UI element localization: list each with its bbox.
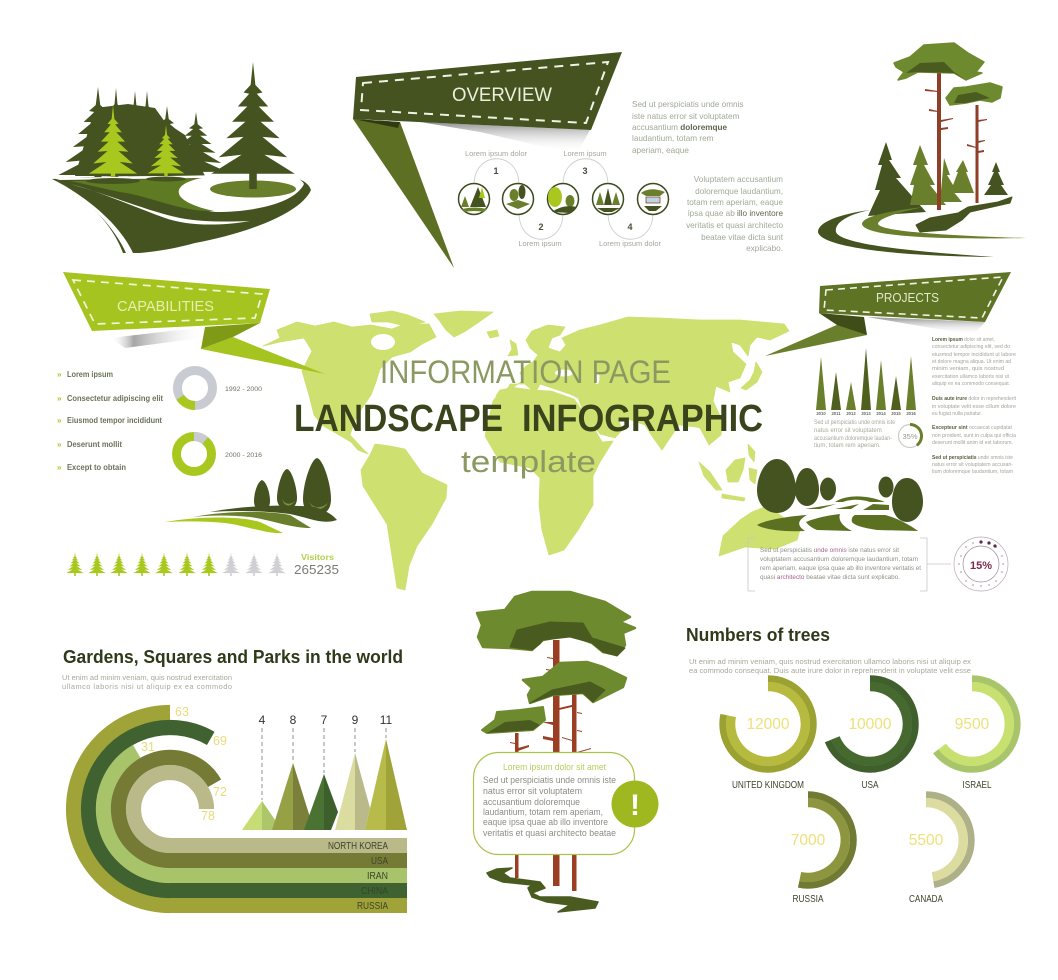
icon: step 2 grove bbox=[502, 184, 534, 214]
info box text: veritatis et quasi architecto beatae bbox=[483, 828, 616, 838]
spike chart years: 2014 bbox=[876, 411, 886, 416]
capabilities list: Deserunt mollit bbox=[67, 440, 122, 449]
pine crown large bbox=[894, 43, 984, 80]
list bullets: » bbox=[57, 394, 62, 403]
visitors counter bbox=[294, 552, 339, 577]
text: overview right paragraph bbox=[686, 175, 784, 253]
band end values: 78 bbox=[201, 809, 215, 823]
ring: russia: RUSSIA bbox=[792, 894, 824, 905]
ring: usa bbox=[828, 679, 915, 791]
map: Sumatra bbox=[699, 462, 722, 490]
text: gardens subtitle bbox=[62, 673, 232, 691]
list bullets: » bbox=[57, 440, 62, 449]
donut: 35%: 35% bbox=[902, 432, 918, 441]
triangle 4 bbox=[335, 753, 355, 830]
map: Hudson Bay bbox=[371, 334, 395, 350]
banner fold bbox=[201, 323, 260, 349]
text: projects column: consectetur adipiscing elit, sed do bbox=[932, 344, 1010, 350]
step numbers: 2 bbox=[538, 222, 544, 232]
capabilities list: Consectetur adipiscing elit bbox=[67, 394, 163, 403]
capabilities list bbox=[57, 370, 163, 472]
map: Borneo bbox=[726, 458, 745, 482]
ring: united kingdom bbox=[723, 679, 813, 791]
spruce trees bbox=[868, 142, 1008, 216]
triangle values: 8 bbox=[290, 713, 297, 727]
donut: 35% bbox=[898, 424, 922, 448]
band labels: NORTH KOREA bbox=[328, 841, 388, 852]
text: overview right paragraph: totam rem aperiam, eaque bbox=[687, 198, 783, 207]
icon: step 5 pavilion bbox=[638, 184, 668, 214]
icon: exclamation badge bbox=[612, 780, 658, 828]
text: overview right paragraph: explicabo. bbox=[746, 244, 783, 253]
band end values: 72 bbox=[213, 785, 227, 799]
dashed leaders bbox=[262, 728, 386, 800]
step labels: Lorem ipsum dolor bbox=[599, 239, 662, 248]
ring: israel: 9500 bbox=[955, 716, 990, 733]
banner fold bbox=[353, 119, 400, 128]
ring: united kingdom: 12000 bbox=[746, 716, 790, 733]
text: projects column: exercitation ullamco laboris nisi ut bbox=[932, 374, 1009, 380]
band labels: CHINA bbox=[361, 886, 388, 897]
map: Java bbox=[722, 494, 745, 501]
banner title: PROJECTS bbox=[876, 291, 939, 305]
road edge bbox=[60, 183, 133, 253]
map: South America bbox=[361, 444, 447, 590]
text: projects column: in voluptate velit esse cillum dolore bbox=[932, 404, 1016, 410]
capabilities list: Lorem ipsum bbox=[67, 370, 113, 379]
text: overview left paragraph: Sed ut perspiciatis unde omnis bbox=[632, 100, 744, 109]
scene: three trees on hills bbox=[165, 458, 337, 533]
map: Eurasia bbox=[496, 317, 789, 450]
icon: step 1 spruce bbox=[458, 184, 490, 214]
hill dark bbox=[210, 506, 337, 522]
banner ribbon bbox=[353, 52, 622, 130]
illustration: pine trees with info box bbox=[474, 592, 658, 912]
band end values bbox=[141, 705, 227, 823]
ring: usa: USA bbox=[862, 780, 879, 791]
info box text bbox=[483, 775, 616, 838]
icon: step 4 park bbox=[592, 184, 624, 214]
arcs bbox=[74, 712, 215, 906]
map: Australia bbox=[719, 506, 800, 556]
tree shadows bbox=[86, 178, 140, 184]
map: arctic islands bbox=[370, 311, 425, 326]
rounded trees bbox=[757, 459, 923, 522]
crown small bbox=[482, 707, 545, 733]
gauge dots bbox=[958, 540, 1004, 587]
banner ribbon bbox=[819, 272, 1011, 322]
ring: canada: 5500 bbox=[909, 832, 944, 849]
text: numbers subtitle bbox=[689, 657, 971, 675]
text: projects column bbox=[932, 337, 1017, 475]
ring: israel: ISRAEL bbox=[962, 780, 992, 791]
donut: 2000-2016 bbox=[176, 436, 262, 472]
stitches bbox=[824, 277, 1003, 318]
text: projects column: non proident, sunt in culpa qui officia bbox=[932, 433, 1017, 439]
text: overview right paragraph: beatae vitae dicta sunt bbox=[701, 233, 784, 242]
title line 2: LANDSCAPE bbox=[294, 398, 503, 440]
horizontal bands bbox=[170, 838, 407, 853]
hill light bbox=[165, 518, 283, 533]
step numbers: 1 bbox=[493, 166, 499, 176]
triangle values: 7 bbox=[321, 713, 328, 727]
map: Japan bbox=[741, 362, 762, 390]
banner tail bbox=[201, 337, 325, 374]
info box text: natus error sit voluptatem bbox=[483, 786, 582, 796]
crown top bbox=[477, 592, 635, 655]
info box text: eaque ipsa quae ab illo inventore bbox=[483, 817, 608, 827]
map: Caspian Sea bbox=[594, 372, 600, 384]
lawn circle bbox=[210, 180, 296, 198]
icon: exclamation badge: ! bbox=[630, 789, 640, 822]
stitches bbox=[361, 62, 608, 123]
text: overview left paragraph: iste natus error sit voluptatem bbox=[632, 112, 740, 121]
triangle values bbox=[259, 713, 393, 727]
crown middle bbox=[523, 662, 626, 703]
banner fold bbox=[819, 313, 867, 335]
step labels: Lorem ipsum bbox=[563, 149, 607, 158]
callout text: quasi architecto beatae vitae dicta sunt explicabo. bbox=[760, 574, 900, 581]
info box text: accusantium doloremque bbox=[483, 797, 580, 807]
spike chart years: 2016 bbox=[906, 411, 916, 416]
donut: 1992-2000: 1992 - 2000 bbox=[225, 386, 262, 393]
triangle 2 bbox=[272, 763, 293, 830]
step labels: Lorem ipsum dolor bbox=[465, 149, 528, 158]
stitches bbox=[73, 280, 262, 324]
scene: pines and winding road bbox=[818, 43, 1026, 257]
title block bbox=[294, 354, 763, 479]
winding river bbox=[916, 197, 1012, 232]
trees bbox=[254, 480, 270, 511]
capabilities list: Eiusmod tempor incididunt bbox=[67, 416, 162, 425]
donut: 2000-2016: 2000 - 2016 bbox=[225, 452, 262, 459]
title line 3: template bbox=[461, 444, 596, 479]
tree highlights bbox=[282, 498, 328, 509]
ring: russia: 7000 bbox=[791, 832, 826, 849]
callout bracket bbox=[748, 538, 951, 591]
banner title: OVERVIEW bbox=[452, 85, 552, 106]
forest backdrop bbox=[58, 87, 227, 187]
text: projects column: minim veniam, quis nostrud bbox=[932, 366, 1004, 372]
pine crown small bbox=[946, 83, 1002, 105]
banner ribbon bbox=[63, 272, 270, 331]
big spruce bbox=[211, 62, 295, 189]
capabilities list: Except to obtain bbox=[67, 463, 126, 472]
text: projects column: eu fugiat nulla pariatur. bbox=[932, 411, 982, 417]
map: United Kingdom bbox=[508, 340, 518, 356]
chart: triangles bbox=[242, 713, 407, 830]
band end values: 63 bbox=[175, 705, 189, 719]
heading: gardens: Gardens, Squares and Parks in the world bbox=[63, 647, 403, 667]
chart: curved bands bbox=[74, 705, 407, 913]
band labels: USA bbox=[371, 856, 388, 867]
list bullets: » bbox=[57, 463, 62, 472]
banner shadow bbox=[420, 122, 590, 152]
text: overview right paragraph: ipsa quae ab illo inventore bbox=[688, 209, 783, 218]
text: chart caption: tium, totam rem aperiam. bbox=[814, 443, 881, 449]
trunks bbox=[510, 640, 591, 891]
spike chart years bbox=[816, 411, 916, 416]
info box title: Lorem ipsum dolor sit amet bbox=[503, 762, 606, 772]
connecting arcs bbox=[474, 159, 653, 239]
world map bbox=[263, 311, 800, 590]
map: Africa bbox=[485, 387, 613, 555]
map: Greenland bbox=[434, 311, 493, 337]
visitors tree row bbox=[66, 552, 286, 576]
text: chart caption: Sed ut perspiciatis unde omnis iste bbox=[814, 420, 896, 426]
text: projects column: Lorem ipsum dolor sit amet, bbox=[932, 337, 995, 343]
text: overview left paragraph: aperiam, eaque bbox=[632, 146, 689, 155]
crown middle shade bbox=[530, 682, 605, 703]
visitors counter: 265235 bbox=[294, 562, 339, 577]
text: overview right paragraph: doloremque laudantium, bbox=[695, 187, 783, 196]
spike chart years: 2011 bbox=[831, 411, 841, 416]
pine crown small shade bbox=[954, 92, 990, 103]
ring: israel bbox=[936, 679, 1017, 791]
icon: step 3 lime tree bbox=[548, 184, 578, 214]
step labels: Lorem ipsum bbox=[518, 239, 562, 248]
info box text: Sed ut perspiciatis unde omnis iste bbox=[483, 775, 616, 785]
text: numbers subtitle: ea commodo consequat. Duis aute irure dolor in reprehenderit in voluptate velit esse bbox=[689, 666, 971, 675]
banner: projects bbox=[765, 272, 1011, 356]
island ground bbox=[52, 176, 311, 253]
step numbers bbox=[493, 166, 633, 232]
gauge: 15% bbox=[954, 537, 1008, 591]
banner tail bbox=[353, 119, 454, 268]
banner title: CAPABILITIES bbox=[117, 299, 214, 315]
text: projects column: aliquip ex ea commodo consequat. bbox=[932, 381, 1010, 387]
pine crown large shade bbox=[906, 62, 966, 80]
ring: usa: 10000 bbox=[848, 716, 892, 733]
visitors counter: Visitors bbox=[301, 552, 334, 562]
lawn bbox=[70, 178, 214, 211]
text: projects column: natus error sit voluptatem accusan- bbox=[932, 462, 1013, 468]
info box bbox=[474, 752, 634, 854]
text: chart caption bbox=[814, 420, 896, 449]
callout text: voluptatem accusantium doloremque laudantium, totam bbox=[760, 556, 918, 563]
band labels: IRAN bbox=[367, 871, 388, 882]
text: chart caption: natus error sit voluptatem bbox=[814, 428, 882, 434]
spike chart years: 2015 bbox=[891, 411, 901, 416]
text: overview left paragraph bbox=[632, 100, 744, 155]
step numbers: 4 bbox=[627, 222, 633, 232]
donut: 1992-2000 bbox=[178, 370, 262, 406]
triangle values: 11 bbox=[380, 713, 393, 727]
step numbers: 3 bbox=[582, 166, 588, 176]
map: North America bbox=[263, 322, 436, 454]
text: projects column: Sed ut perspiciatis unde omnis iste bbox=[932, 455, 1013, 461]
scene: park with rounded trees bbox=[757, 459, 923, 531]
text: overview left paragraph: accusantium doloremque bbox=[632, 123, 728, 132]
text: gardens subtitle: Ut enim ad minim veniam, quis nostrud exercitation bbox=[62, 673, 232, 682]
banner shadow bbox=[867, 317, 985, 335]
crown top shade bbox=[510, 622, 625, 656]
hill olive bbox=[193, 512, 311, 528]
text: overview left paragraph: laudantium, totam rem bbox=[632, 134, 714, 143]
banner: capabilities bbox=[63, 272, 325, 374]
spike chart years: 2013 bbox=[861, 411, 871, 416]
overview timeline bbox=[458, 149, 668, 248]
step labels bbox=[465, 149, 662, 248]
map: Black Sea bbox=[555, 370, 573, 376]
triangle values: 9 bbox=[352, 713, 359, 727]
lower swoosh bbox=[70, 184, 250, 225]
title line 1: INFORMATION PAGE bbox=[380, 354, 671, 390]
crown small shade bbox=[487, 720, 540, 733]
gauge: 15%: 15% bbox=[970, 560, 992, 572]
list bullets bbox=[57, 370, 62, 472]
text: chart caption: accusantium doloremque laudan- bbox=[814, 436, 892, 442]
ring: canada: CANADA bbox=[909, 894, 943, 905]
band labels bbox=[328, 841, 388, 912]
ring: russia bbox=[791, 795, 853, 905]
text: numbers subtitle: Ut enim ad minim veniam, quis nostrud exercitation ullamco laboris nisi ut aliquip ex bbox=[689, 657, 971, 666]
list bullets: » bbox=[57, 370, 62, 379]
text: projects column: Duis aute irure dolor in reprehenderit bbox=[932, 396, 1016, 402]
callout text: Sed ut perspiciatis unde omnis iste natus error sit bbox=[760, 547, 899, 554]
banner: overview bbox=[353, 52, 622, 268]
band end values: 31 bbox=[141, 740, 155, 754]
road outer bbox=[818, 210, 994, 257]
band labels: RUSSIA bbox=[357, 901, 388, 912]
pine trunks bbox=[925, 72, 987, 210]
triangle values: 4 bbox=[259, 713, 266, 727]
text: projects column: Excepteur sint occaecat cupidatat bbox=[932, 425, 1012, 431]
title line 2 bbox=[294, 398, 763, 440]
banner tail bbox=[765, 324, 867, 356]
ring: united kingdom: UNITED KINGDOM bbox=[732, 780, 804, 791]
spike chart years: 2012 bbox=[846, 411, 856, 416]
scene: spruce forest island bbox=[52, 62, 311, 253]
spike chart years: 2010 bbox=[816, 411, 826, 416]
text: overview right paragraph: veritatis et quasi architecto bbox=[686, 221, 783, 230]
info box text: laudantium, totam rem aperiam, bbox=[483, 807, 603, 817]
list bullets: » bbox=[57, 416, 62, 425]
triangle 5 bbox=[365, 739, 386, 830]
heading: numbers of trees: Numbers of trees bbox=[686, 625, 830, 645]
spike chart bbox=[816, 348, 916, 416]
triangle 1 bbox=[242, 801, 262, 830]
text: overview right paragraph: Voluptatem accusantium bbox=[694, 175, 783, 184]
band end values: 69 bbox=[213, 734, 227, 748]
ring: canada bbox=[909, 795, 971, 905]
white road swirl bbox=[52, 174, 304, 212]
triangle 3 bbox=[304, 774, 324, 830]
title line 2: INFOGRAPHIC bbox=[522, 398, 763, 440]
text: projects column: tium doloremque laudantium, totam bbox=[932, 469, 1013, 475]
banner shadow bbox=[110, 327, 205, 348]
text: gardens subtitle: ullamco laboris nisi ut aliquip ex ea commodo bbox=[62, 682, 232, 691]
text: projects column: et dolore magna aliqua. Ut enim ad bbox=[932, 359, 1011, 365]
light spruce trees bbox=[89, 105, 184, 183]
text: projects column: eiusmod tempor incididunt ut labore bbox=[932, 352, 1016, 358]
map: Sulawesi and Philippines bbox=[748, 444, 757, 484]
river bbox=[487, 868, 598, 912]
callout text bbox=[760, 547, 921, 581]
callout text: rem aperiam, eaque ipsa quae ab illo inventore veritatis et bbox=[760, 565, 921, 572]
text: projects column: deserunt mollit anim id est laborum. bbox=[932, 440, 1013, 446]
lawn pieces bbox=[757, 496, 918, 531]
map: Iceland bbox=[487, 330, 499, 338]
road middle bbox=[862, 207, 1026, 238]
